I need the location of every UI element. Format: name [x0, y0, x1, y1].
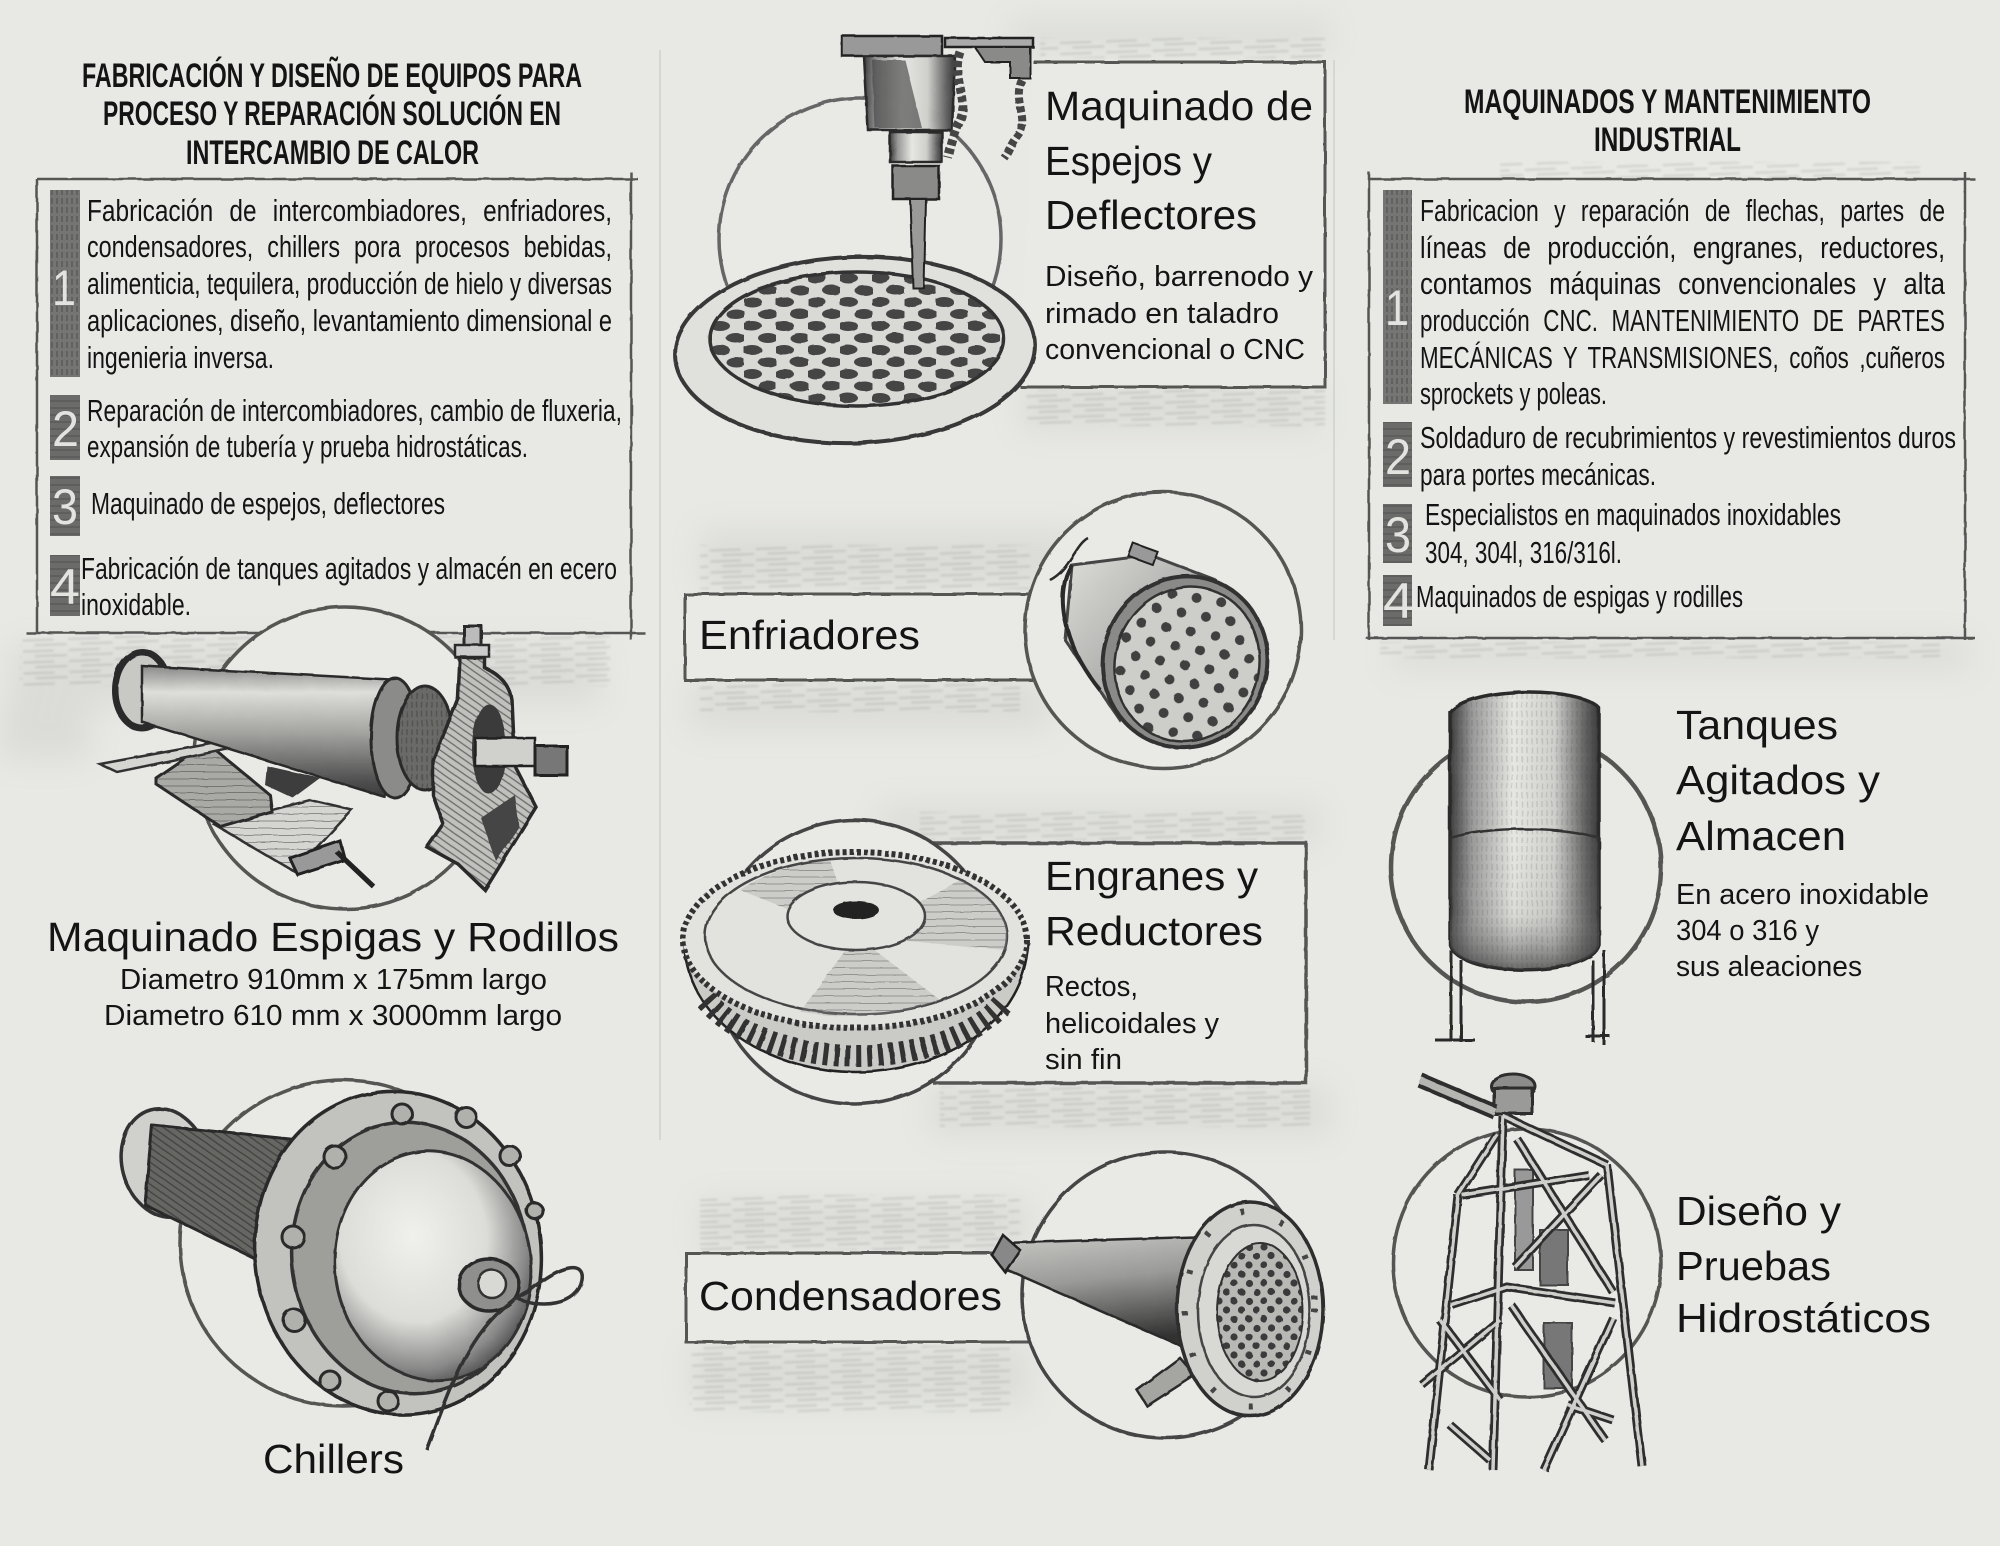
circle backdrop [194, 607, 496, 909]
label text: Enfriadores [699, 612, 920, 658]
item 3: 304, 304l, 316/316l. [1425, 535, 1622, 570]
list frame [26, 172, 645, 640]
label text: sin fin [1045, 1044, 1122, 1076]
item 2 [1383, 420, 1956, 492]
label text: Almacen [1676, 813, 1846, 859]
item 3: 3 [1385, 507, 1411, 563]
label text [1676, 1188, 1931, 1341]
label text: Engranes y [1045, 853, 1259, 899]
panel: maquinados heading: INDUSTRIAL [1594, 121, 1741, 159]
panel: enfriadores [685, 492, 1301, 769]
label text: Reductores [1045, 908, 1263, 954]
item 2: expansión de tubería y prueba hidrostáticas. [87, 429, 528, 464]
label text [1045, 853, 1263, 1076]
circle backdrop [1022, 1152, 1308, 1438]
panel: maquinado de espejos y deflectores [672, 36, 1325, 449]
panel: fabricación heading: PROCESO Y REPARACIÓN SOLUCIÓN EN [103, 95, 561, 133]
label text: convencional o CNC [1045, 334, 1305, 366]
panel: maquinado espigas y rodillos [47, 607, 619, 1032]
item 1 [1383, 190, 1946, 411]
circle backdrop [1393, 1129, 1661, 1397]
item 4: 4 [1383, 573, 1414, 629]
label text: Maquinado Espigas y Rodillos [47, 914, 619, 960]
label frame [1020, 62, 1325, 387]
item 1: Fabricación de intercombiadores, enfriadores, [87, 193, 612, 228]
item 2: Reparación de intercombiadores, cambio de fluxeria, [87, 393, 622, 428]
item 1: 1 [52, 260, 76, 316]
illustration: tank [1435, 692, 1610, 1045]
label text: Maquinado de [1045, 83, 1313, 129]
item 1 [50, 190, 612, 377]
illustration: condenser [992, 1202, 1323, 1416]
panel: chillers [109, 1073, 582, 1482]
label frame [686, 1253, 1040, 1342]
item 2: 2 [1385, 429, 1411, 485]
circle backdrop [180, 1080, 506, 1406]
panel: tanques agitados y almacen [1391, 692, 1929, 1045]
item 3: 3 [52, 479, 78, 535]
label text: Hidrostáticos [1676, 1295, 1931, 1341]
label text: Espejos y [1045, 138, 1212, 184]
illustration: drill [842, 36, 1033, 288]
label frame [685, 594, 1040, 680]
item 1: aplicaciones, diseño, levantamiento dimensional e [87, 303, 612, 338]
list frame [1366, 172, 1975, 640]
item 2: 2 [52, 401, 79, 457]
item 3 [50, 476, 445, 536]
panel: fabricación heading: FABRICACIÓN Y DISEÑO DE EQUIPOS PARA [82, 57, 582, 95]
label text: Pruebas [1676, 1243, 1831, 1289]
circle backdrop [1025, 492, 1301, 768]
label text: helicoidales y [1045, 1008, 1219, 1040]
panel: fabricación heading [82, 57, 582, 172]
item 3 [1383, 497, 1841, 570]
panel: maquinados list [1366, 172, 1975, 640]
label text [47, 914, 619, 1032]
item 4: 4 [50, 559, 80, 615]
item 1: ingenieria inversa. [87, 340, 274, 375]
label text: Diseño y [1676, 1188, 1842, 1234]
illustration: tower [1420, 1074, 1642, 1470]
label text: sus aleaciones [1676, 951, 1862, 983]
item 4: inoxidable. [81, 587, 191, 622]
label text: Diametro 610 mm x 3000mm largo [104, 1000, 562, 1032]
illustration: perforated plate [672, 251, 1038, 449]
label text: Agitados y [1676, 757, 1881, 803]
pencil column guides [660, 50, 1334, 1140]
item 2 [50, 393, 622, 464]
label frame [933, 843, 1306, 1083]
label text: Condensadores [699, 1273, 1002, 1319]
circle backdrop [1391, 732, 1661, 1002]
item 1: sprockets y poleas. [1420, 376, 1607, 411]
label text: Diseño, barrenodo y [1045, 261, 1314, 293]
label text: En acero inoxidable [1676, 879, 1929, 911]
panel: fabricación list [26, 172, 645, 640]
label text: Diametro 910mm x 175mm largo [120, 964, 547, 996]
item 1: condensadores, chillers pora procesos bebidas, [87, 229, 612, 264]
circle backdrop [719, 98, 1001, 380]
label text: Chillers [263, 1436, 404, 1482]
item 1: alimenticia, tequilera, producción de hielo y diversas [87, 266, 612, 301]
panel: engranes y reductores [683, 820, 1306, 1104]
item 3: Maquinado de espejos, deflectores [91, 486, 445, 521]
item 1: 1 [1385, 280, 1409, 336]
illustration: cooler [1050, 538, 1290, 769]
illustration: chiller [109, 1073, 582, 1450]
label text: Tanques [1676, 702, 1838, 748]
label text: 304 o 316 y [1676, 915, 1819, 947]
panel: diseño y pruebas hidrostáticos [1393, 1074, 1931, 1470]
item 4: Maquinados de espigas y rodilles [1416, 579, 1743, 614]
item 4 [50, 551, 617, 622]
label text [1676, 702, 1929, 983]
item 2: para portes mecánicas. [1420, 457, 1656, 492]
panel: maquinados heading [1464, 83, 1871, 159]
circle backdrop [713, 820, 997, 1104]
panel: condensadores [686, 1152, 1323, 1438]
item 3: Especialistos en maquinados inoxidables [1425, 497, 1841, 532]
label text: Rectos, [1045, 971, 1138, 1003]
item 4: Fabricación de tanques agitados y almacén en ecero [81, 551, 617, 586]
illustration: lathe [100, 626, 567, 890]
label text [1045, 83, 1314, 366]
panel: fabricación heading: INTERCAMBIO DE CALOR [186, 134, 479, 172]
label text: Deflectores [1045, 192, 1257, 238]
label text: rimado en taladro [1045, 298, 1279, 330]
illustration: gear [683, 852, 1028, 1072]
item 4 [1383, 573, 1743, 629]
